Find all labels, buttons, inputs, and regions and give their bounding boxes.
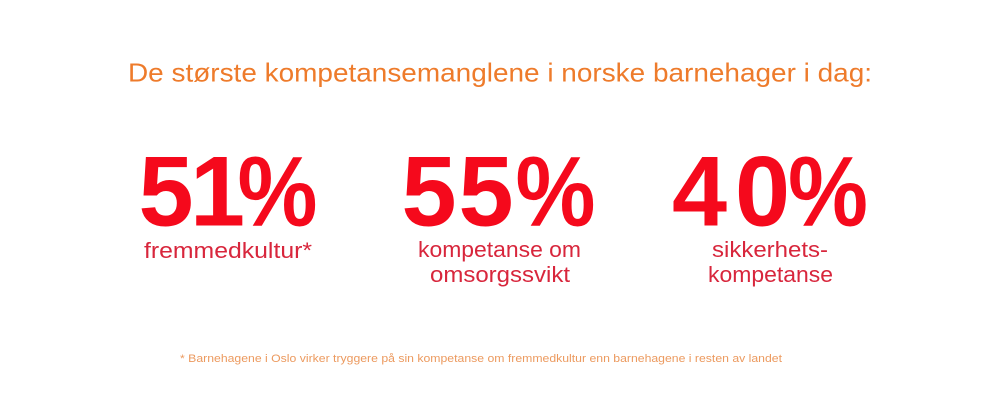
label: sikkerhetskompetanse: kompetanse <box>708 262 833 287</box>
label: kompetanse om omsorgssvikt: kompetanse om <box>418 237 581 262</box>
number: 40%: 4 <box>672 136 727 246</box>
stat: 40% sikkerhetskompetanse <box>672 136 868 287</box>
number: 51%: % <box>238 136 318 246</box>
number: 51%: 5 <box>138 136 194 246</box>
label: sikkerhetskompetanse <box>708 237 833 287</box>
label: fremmedkultur: fremmedkultur* <box>144 238 312 263</box>
number: 40%: % <box>788 136 868 246</box>
number: 51% <box>138 136 318 246</box>
title: De største kompetansemanglene i norske barnehager i dag: <box>128 58 872 88</box>
label: sikkerhetskompetanse: sikkerhets- <box>712 237 828 262</box>
number: 40%: 0 <box>735 136 790 246</box>
stat: 55% kompetanse om omsorgssvikt <box>402 136 596 287</box>
number: 51%: 1 <box>190 136 245 246</box>
number: 55% <box>402 136 596 246</box>
label: kompetanse om omsorgssvikt <box>418 237 581 287</box>
footnote: * Barnehagene i Oslo virker tryggere på sin kompetanse om fremmedkultur enn barnehagene i resten av landet <box>180 353 782 365</box>
label: kompetanse om omsorgssvikt: omsorgssvikt <box>430 262 570 287</box>
number: 40% <box>672 136 868 246</box>
number: 55%: 5 <box>458 136 514 246</box>
stat: 51% fremmedkultur <box>138 136 318 263</box>
number: 55%: 5 <box>402 136 457 246</box>
number: 55%: % <box>516 136 596 246</box>
